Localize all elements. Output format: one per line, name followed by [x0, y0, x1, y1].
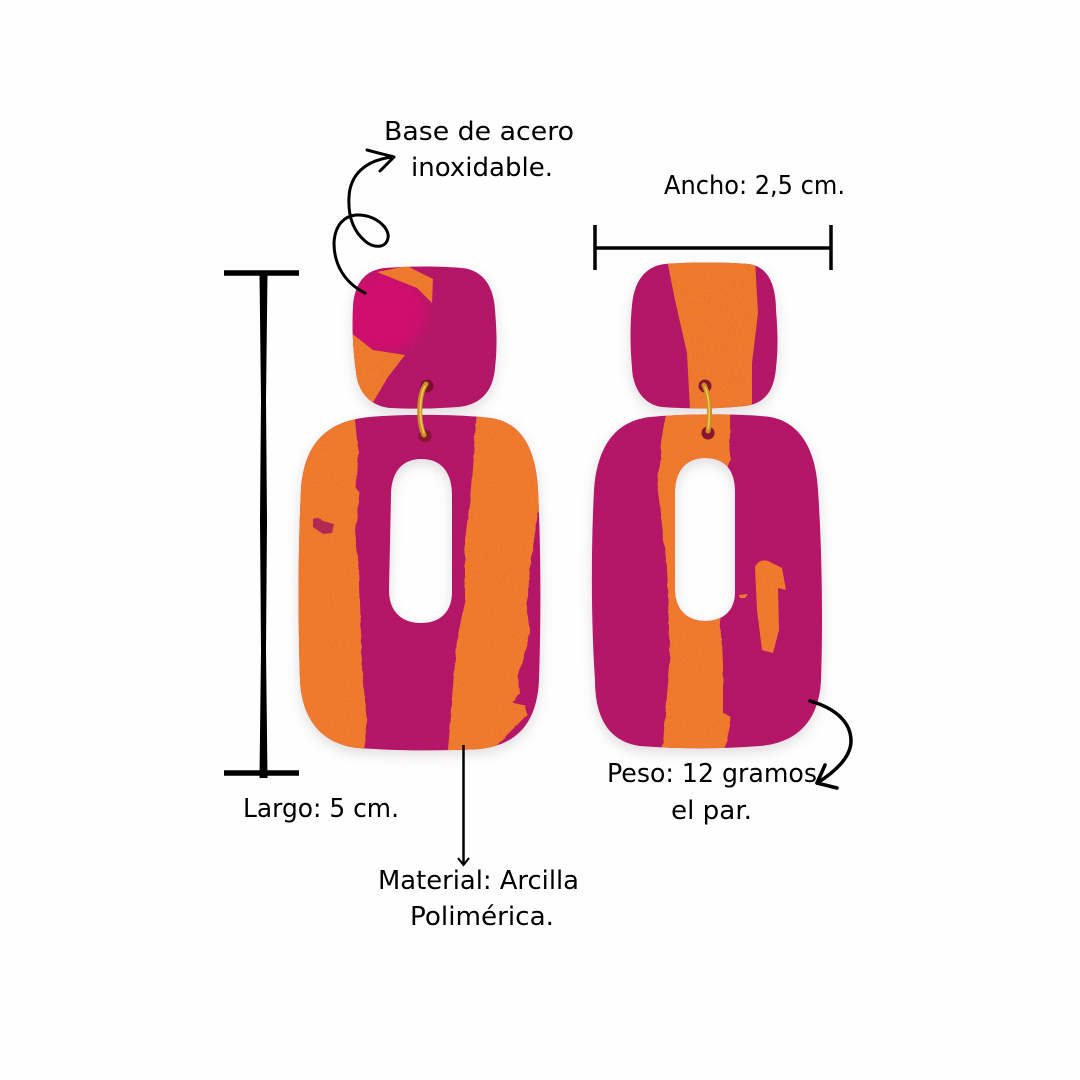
right top square piece [630, 260, 778, 410]
label: weight: el par. [671, 796, 752, 826]
label: length: Largo: 5 cm. [243, 794, 399, 824]
label: weight [607, 759, 817, 826]
label: base: inoxidable. [411, 153, 553, 183]
left earring [290, 258, 545, 755]
curly arrow: base [334, 150, 394, 293]
hole top right [698, 380, 712, 392]
arrow: material [458, 745, 469, 865]
right earring [592, 260, 822, 753]
length measure bar [224, 273, 299, 778]
right earring shadow [592, 268, 822, 753]
left big piece with window [290, 384, 545, 755]
infographic canvas [224, 120, 853, 926]
left top square piece [352, 266, 496, 409]
gold ring left [420, 384, 426, 435]
label: material: Polimérica. [410, 902, 554, 932]
label: material: Material: Arcilla [378, 866, 579, 896]
left earring shadow [299, 272, 540, 755]
right big piece with window [592, 385, 822, 752]
hole top left [420, 380, 434, 392]
label: weight: Peso: 12 gramos [607, 759, 817, 789]
label: material [378, 866, 579, 932]
hole bottom left [418, 430, 432, 442]
curly arrow: weight [810, 701, 851, 788]
width measure bar [595, 225, 831, 270]
gold ring right [704, 385, 710, 431]
label: base [384, 117, 574, 183]
label: width: Ancho: 2,5 cm. [664, 171, 845, 201]
label: base: Base de acero [384, 117, 574, 147]
hole bottom right [702, 426, 714, 440]
